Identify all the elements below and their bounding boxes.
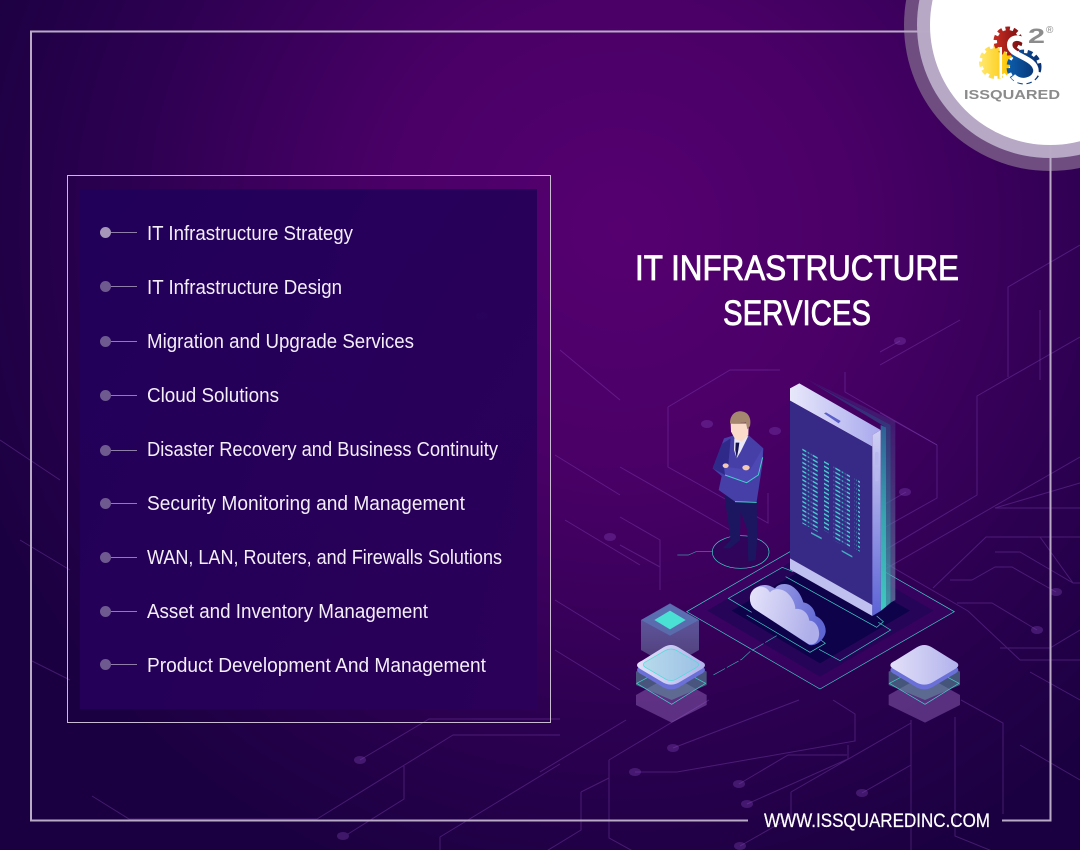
man cable bbox=[677, 552, 713, 555]
list item: Asset and Inventory Management: Asset and Inventory Management bbox=[147, 601, 428, 623]
phone screen bbox=[790, 401, 872, 605]
man jacket bbox=[713, 435, 763, 502]
man head bbox=[731, 423, 749, 442]
panel fill bbox=[80, 189, 537, 709]
website url: WWW.ISSQUAREDINC.COM bbox=[764, 811, 990, 832]
logo gears bbox=[981, 28, 1040, 82]
title: SERVICES bbox=[723, 294, 871, 333]
phone side bbox=[872, 430, 881, 616]
list item: WAN, LAN, Routers, and Firewalls Solutions: WAN, LAN, Routers, and Firewalls Solutions bbox=[147, 547, 502, 569]
man shirt and tie bbox=[734, 436, 748, 458]
phone bottom bezel bbox=[790, 558, 872, 616]
logo bbox=[930, 0, 1080, 145]
logo superscript: 2 bbox=[1028, 25, 1045, 48]
logo wordmark: ISSQUARED bbox=[964, 88, 1060, 102]
man legs bbox=[723, 495, 757, 562]
title bbox=[635, 249, 959, 333]
list item: Disaster Recovery and Business Continuity: Disaster Recovery and Business Continuity bbox=[147, 439, 498, 461]
list item: Security Monitoring and Management: Security Monitoring and Management bbox=[147, 493, 465, 515]
translucent cube bbox=[641, 603, 699, 667]
logo rings bbox=[904, 0, 1080, 171]
list item: IT Infrastructure Strategy: IT Infrastructure Strategy bbox=[147, 223, 353, 245]
background circuit nodes bbox=[337, 312, 1062, 850]
reflection bbox=[636, 675, 707, 723]
title: IT INFRASTRUCTURE bbox=[635, 249, 959, 288]
man left arm bbox=[713, 438, 731, 475]
tile glow bbox=[643, 649, 699, 681]
background circuit lines bbox=[0, 245, 1080, 850]
list item: Product Development And Management: Product Development And Management bbox=[147, 655, 486, 677]
panel: services list bbox=[68, 176, 550, 722]
right stacked tile bbox=[889, 645, 960, 723]
platform bbox=[687, 534, 954, 689]
tile side bbox=[637, 650, 705, 689]
man hands bbox=[723, 463, 729, 468]
man forearm bbox=[724, 448, 763, 483]
logo disc bbox=[930, 0, 1080, 145]
tile top bbox=[637, 645, 705, 685]
man base ring bbox=[712, 536, 769, 568]
phone buttons bbox=[875, 452, 879, 465]
phone top edge bbox=[790, 383, 881, 447]
phone bbox=[790, 383, 881, 616]
wire: platform to cube bbox=[713, 636, 777, 675]
phone screen code bbox=[802, 448, 860, 558]
phone speaker bbox=[824, 412, 841, 423]
man bbox=[677, 411, 769, 568]
left stacked cube bbox=[636, 603, 707, 723]
panel border bbox=[68, 176, 550, 722]
logo registered mark: ® bbox=[1046, 25, 1054, 36]
cloud bbox=[750, 584, 826, 645]
list item: IT Infrastructure Design: IT Infrastructure Design bbox=[147, 277, 342, 299]
phone layers bbox=[805, 378, 895, 611]
illustration: infrastructure isometric scene bbox=[636, 378, 960, 723]
list item: Migration and Upgrade Services: Migration and Upgrade Services bbox=[147, 331, 414, 353]
list item: Cloud Solutions: Cloud Solutions bbox=[147, 385, 279, 407]
